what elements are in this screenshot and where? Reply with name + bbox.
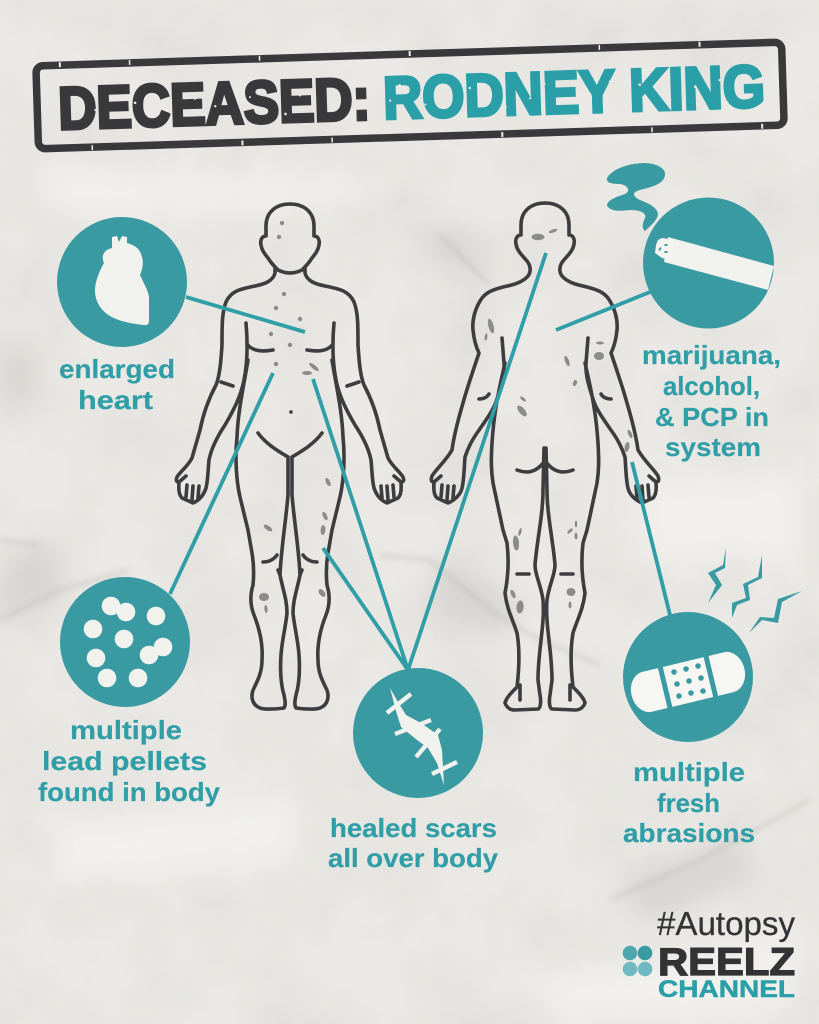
- title: deceased: DECEASED:: [57, 65, 371, 142]
- stamp frame: [36, 42, 784, 149]
- title stamp: [36, 39, 784, 152]
- label: [642, 340, 781, 462]
- leader lines: [170, 253, 670, 670]
- icon: smoke: [607, 163, 665, 231]
- callout: drugs in system: [607, 163, 781, 462]
- label: [38, 715, 221, 807]
- hashtag: #Autopsy: [657, 905, 795, 942]
- callout: lead pellets: [38, 577, 221, 807]
- label: multiple: [70, 715, 182, 745]
- label: abrasions: [623, 818, 755, 848]
- label: [59, 354, 175, 415]
- icon: pain bolts: [708, 547, 802, 633]
- label: alcohol,: [663, 371, 760, 401]
- callout: fresh abrasions: [623, 547, 802, 848]
- figure: back body: [431, 203, 659, 710]
- callout: healed scars: [328, 668, 499, 873]
- label: multiple: [633, 757, 745, 787]
- logo wordmark: REELZ: [658, 941, 795, 984]
- title: rodney king: RODNEY KING: [382, 53, 766, 132]
- icon: heart: [57, 217, 187, 347]
- label: marijuana,: [642, 340, 781, 370]
- icon: scar: [353, 668, 483, 798]
- label: [623, 757, 755, 848]
- logo: Reelz Channel: [623, 941, 795, 1003]
- label: heart: [78, 385, 153, 415]
- label: [328, 813, 499, 873]
- label: enlarged: [59, 354, 175, 384]
- icon: bandage: [623, 612, 753, 742]
- label: all over body: [328, 843, 499, 873]
- label: fresh: [657, 788, 720, 818]
- label: system: [665, 432, 761, 462]
- label: & PCP in: [655, 402, 769, 432]
- label: found in body: [38, 777, 221, 807]
- label: healed scars: [330, 813, 497, 843]
- logo channel: CHANNEL: [658, 976, 795, 1003]
- callout: enlarged heart: [57, 217, 187, 415]
- icon: cigarette: [643, 198, 774, 328]
- logo dots: [623, 946, 652, 976]
- icon: pellets: [60, 577, 190, 707]
- figure: front body: [176, 204, 404, 709]
- label: lead pellets: [42, 746, 207, 776]
